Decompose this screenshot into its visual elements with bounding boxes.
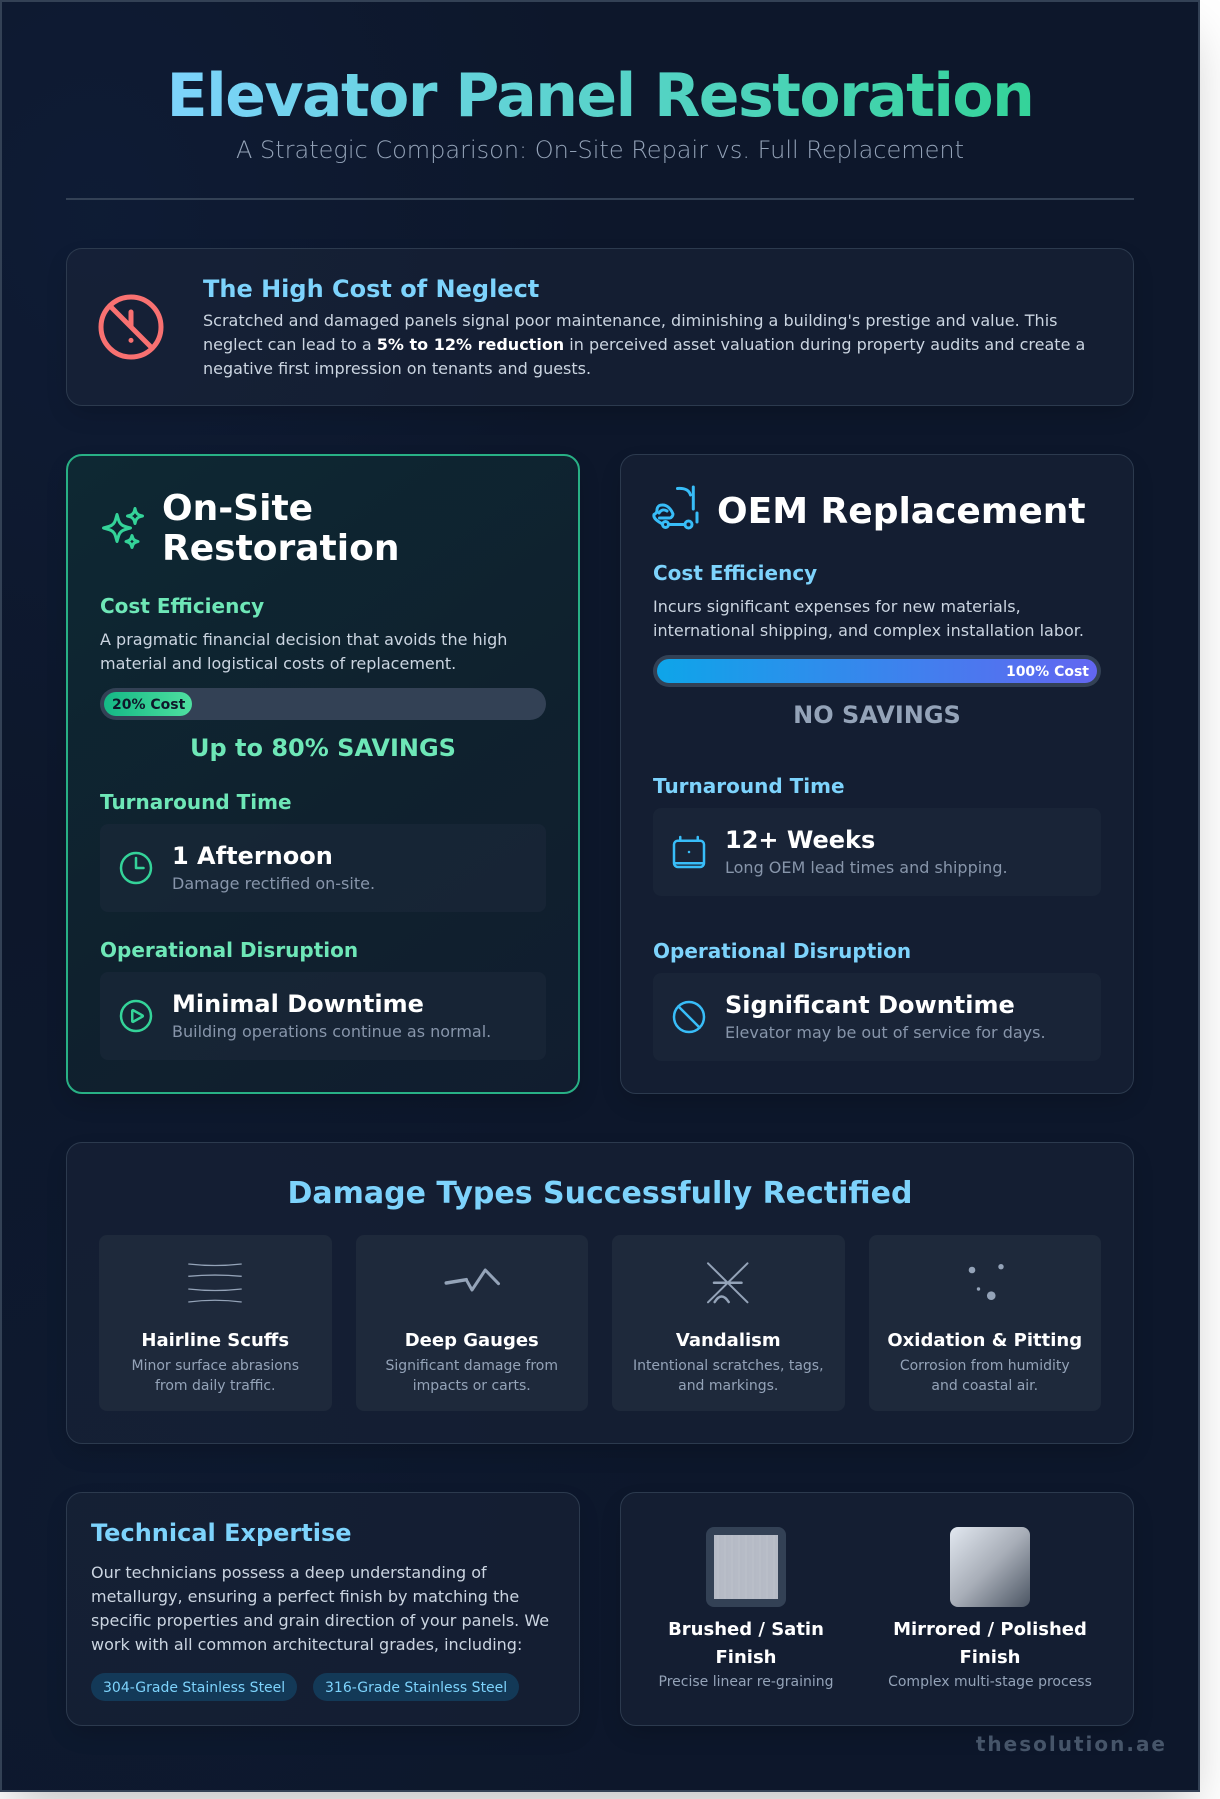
text: cost description xyxy=(653,597,1084,640)
title: brushed: Finish xyxy=(716,1647,776,1668)
chip: 304 grade xyxy=(91,1673,297,1701)
title: brushed xyxy=(668,1619,824,1668)
description: and coastal air. xyxy=(931,1378,1038,1394)
panel: the high cost of neglect xyxy=(66,248,1134,406)
icon: gouge xyxy=(444,1268,500,1292)
value: 1 afternoon: 1 Afternoon xyxy=(172,842,333,870)
bar fill: 100% xyxy=(657,659,1097,683)
label: turnaround time: Turnaround Time xyxy=(100,790,292,814)
description xyxy=(385,1358,558,1394)
description: Significant damage from xyxy=(385,1358,558,1374)
value: significant downtime: Significant Downtime xyxy=(725,991,1015,1019)
title: brushed: Brushed / Satin xyxy=(668,1619,824,1640)
heading: neglect: The High Cost of Neglect xyxy=(203,275,539,303)
card: hairline scuffs xyxy=(99,1235,332,1411)
text: expertise description: specific properties and grain direction of your panels. We xyxy=(91,1611,549,1630)
text: neglect description: negative first impression on tenants and guests. xyxy=(203,359,591,378)
card: oxidation and pitting xyxy=(868,1235,1101,1411)
description: Corrosion from humidity xyxy=(900,1358,1070,1374)
title: Elevator Panel Restoration xyxy=(167,61,1033,131)
chip: 316 grade: 316-Grade Stainless Steel xyxy=(325,1680,507,1696)
bar: 100% cost xyxy=(653,655,1101,687)
card: vandalism xyxy=(612,1235,844,1411)
swatch: mirrored xyxy=(950,1527,1030,1607)
description xyxy=(633,1358,824,1394)
title: mirrored: Finish xyxy=(960,1647,1020,1668)
text: expertise description: work with all common architectural grades, including: xyxy=(91,1635,522,1654)
bar fill: 100%: 100% Cost xyxy=(1006,664,1089,680)
description xyxy=(900,1358,1070,1394)
description: Intentional scratches, tags, xyxy=(633,1358,824,1374)
panel: finishes xyxy=(620,1492,1134,1726)
title: mirrored xyxy=(893,1619,1087,1668)
note: lead times: Long OEM lead times and shipping. xyxy=(725,858,1008,877)
heading: on-site restoration xyxy=(162,488,399,569)
icon: forklift truck xyxy=(652,486,698,530)
heading: on-site restoration: Restoration xyxy=(162,528,399,569)
label: turnaround time: Turnaround Time xyxy=(653,774,845,798)
text: neglect description: Scratched and damaged panels signal poor maintenance, diminishing a building's prestige and value. This xyxy=(203,311,1057,330)
title: deep gauges: Deep Gauges xyxy=(405,1330,539,1351)
text: cost description xyxy=(100,630,507,673)
card: 1 afternoon xyxy=(100,824,546,912)
description: Precise linear re-graining xyxy=(658,1674,834,1690)
panel: technical expertise xyxy=(66,1492,580,1726)
text: cost description: Incurs significant expenses for new materials, xyxy=(653,597,1021,616)
watermark: thesolution.ae xyxy=(976,1732,1167,1756)
panel: damage types xyxy=(66,1142,1134,1444)
bar fill: 20%: 20% Cost xyxy=(112,697,185,713)
icon: hairline scratches xyxy=(188,1263,242,1303)
heading: technical expertise: Technical Expertise xyxy=(91,1519,352,1547)
text: expertise description: metallurgy, ensuring a perfect finish by matching the xyxy=(91,1587,519,1606)
text: cost description: international shipping, and complex installation labor. xyxy=(653,621,1084,640)
title: vandalism: Vandalism xyxy=(676,1330,781,1351)
icon: clock xyxy=(120,852,152,884)
heading: on-site restoration: On-Site xyxy=(162,488,313,529)
note: operations continue: Building operations continue as normal. xyxy=(172,1022,491,1041)
finish: brushed satin xyxy=(658,1527,834,1690)
card: minimal downtime xyxy=(100,972,546,1060)
chip: 304 grade: 304-Grade Stainless Steel xyxy=(103,1680,285,1696)
description: impacts or carts. xyxy=(413,1378,531,1394)
callout: savings: Up to 80% SAVINGS xyxy=(190,734,456,762)
text: expertise description xyxy=(91,1563,549,1654)
icon: calendar xyxy=(672,836,706,868)
value: minimal downtime: Minimal Downtime xyxy=(172,990,424,1018)
panel: on-site restoration xyxy=(66,454,580,1094)
card: 12+ weeks xyxy=(653,808,1101,896)
description: Minor surface abrasions xyxy=(131,1358,299,1374)
swatch: brushed xyxy=(706,1527,786,1607)
description: Complex multi-stage process xyxy=(888,1674,1092,1690)
icon: no symbol xyxy=(672,1000,706,1034)
title: hairline scuffs: Hairline Scuffs xyxy=(141,1330,289,1351)
title: oxidation and pitting: Oxidation & Pitting xyxy=(887,1330,1082,1351)
icon: pitting dots xyxy=(968,1264,1004,1300)
chip: 316 grade xyxy=(313,1673,519,1701)
description: from daily traffic. xyxy=(155,1378,276,1394)
heading: oem replacement: OEM Replacement xyxy=(717,491,1086,532)
icon: play circle xyxy=(120,1000,152,1032)
subtitle: A Strategic Comparison: On-Site Repair vs. Full Replacement xyxy=(236,136,964,164)
note: out of service: Elevator may be out of service for days. xyxy=(725,1023,1046,1042)
label: operational disruption: Operational Disruption xyxy=(100,938,358,962)
description: and markings. xyxy=(678,1378,778,1394)
icon: crossed scratches xyxy=(707,1262,748,1304)
label: cost efficiency: Cost Efficiency xyxy=(100,594,264,618)
text: cost description: A pragmatic financial decision that avoids the high xyxy=(100,630,507,649)
bar: 20% cost xyxy=(100,688,546,720)
text: neglect description xyxy=(203,311,1085,378)
callout: no savings: NO SAVINGS xyxy=(793,701,961,729)
label: cost efficiency: Cost Efficiency xyxy=(653,561,817,585)
card: significant downtime xyxy=(653,973,1101,1061)
finish: mirrored polished xyxy=(888,1527,1092,1690)
text: expertise description: Our technicians possess a deep understanding of xyxy=(91,1563,487,1582)
heading: damage types: Damage Types Successfully Rectified xyxy=(288,1176,912,1211)
panel: oem replacement xyxy=(620,454,1134,1094)
icon: warning no-symbol xyxy=(98,294,164,360)
note: damage rectified: Damage rectified on-site. xyxy=(172,874,375,893)
text: neglect description: neglect can lead to a 5% to 12% reduction in perceived asset valuation during property audits and create a xyxy=(203,335,1085,354)
card: deep gauges xyxy=(356,1235,588,1411)
text: cost description: material and logistical costs of replacement. xyxy=(100,654,456,673)
title: mirrored: Mirrored / Polished xyxy=(893,1619,1087,1640)
bar fill: 20% xyxy=(104,692,192,716)
icon: sparkles xyxy=(102,507,144,549)
description xyxy=(131,1358,299,1394)
label: operational disruption: Operational Disruption xyxy=(653,939,911,963)
value: 12+ weeks: 12+ Weeks xyxy=(725,826,875,854)
